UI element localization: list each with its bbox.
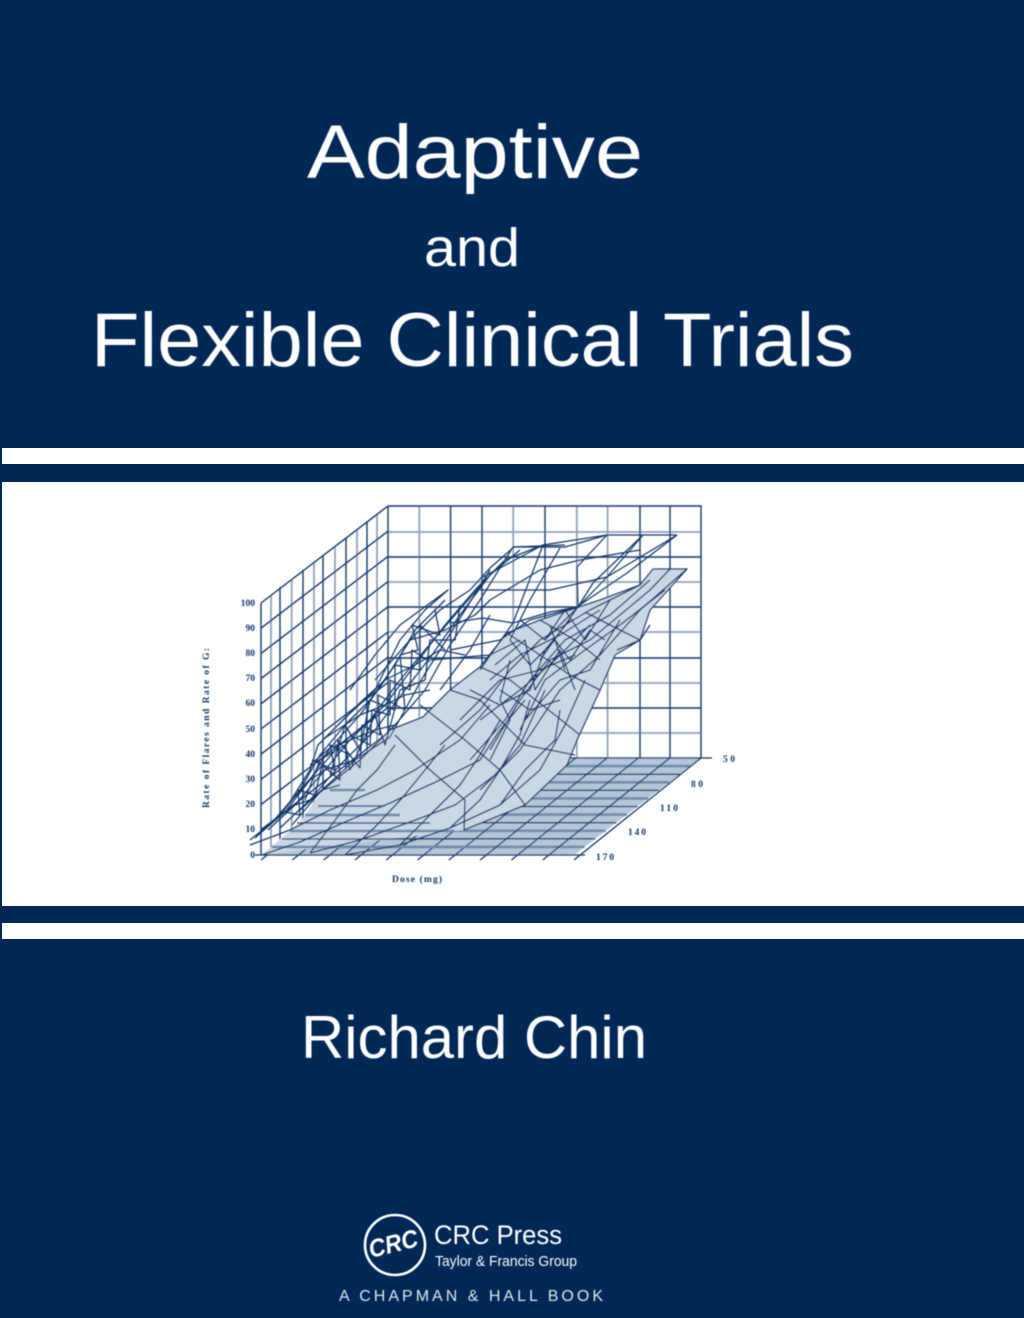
- upper white band: [2, 448, 1024, 464]
- icon: CRC circle: CRC: [366, 1224, 422, 1264]
- chart axis labels: 110: [660, 804, 678, 814]
- chart axis labels: 50: [723, 755, 735, 765]
- title: Flexible Clinical Trials: [91, 298, 854, 383]
- chart axis labels: 140: [628, 828, 646, 838]
- publisher group: Taylor & Francis Group: [435, 1253, 577, 1270]
- chart back wall and side wall grid: [261, 506, 701, 855]
- chart axis labels: Rate of Flares and Rate of G:: [202, 648, 212, 808]
- chart axis labels: 80: [691, 780, 703, 790]
- chart axis labels: 70: [246, 674, 255, 684]
- 3D surface chart: [202, 506, 735, 885]
- lower white band: [2, 923, 1024, 939]
- title: [91, 110, 854, 383]
- chart axis labels: 170: [596, 853, 614, 863]
- chart axis labels: 100: [241, 599, 255, 609]
- white chart panel: [2, 482, 1024, 906]
- chart axis labels: 60: [246, 699, 255, 709]
- imprint line: A CHAPMAN & HALL BOOK: [339, 1288, 603, 1305]
- chart axis labels: 20: [246, 800, 255, 810]
- title: Adaptive: [307, 110, 643, 195]
- chart floor grid: [255, 758, 712, 860]
- chart axis labels: Dose (mg): [392, 874, 442, 885]
- publisher logo: [339, 1215, 603, 1305]
- wireframe response surface: [250, 535, 677, 840]
- publisher name: CRC Press: [434, 1220, 562, 1250]
- chart axis labels: 0: [250, 851, 255, 861]
- shaded response surface: [250, 569, 687, 855]
- chart axis labels: 90: [246, 624, 255, 634]
- chart axis labels: 80: [246, 649, 255, 659]
- icon: CRC circle: [365, 1215, 425, 1275]
- chart axis labels: 40: [246, 750, 255, 760]
- chart axis labels: 30: [246, 775, 255, 785]
- chart axis labels: 50: [246, 725, 255, 735]
- chart axis labels: [202, 599, 735, 885]
- title: and: [424, 218, 520, 278]
- author name: Richard Chin: [301, 1004, 647, 1071]
- chart axis labels: 10: [246, 825, 255, 835]
